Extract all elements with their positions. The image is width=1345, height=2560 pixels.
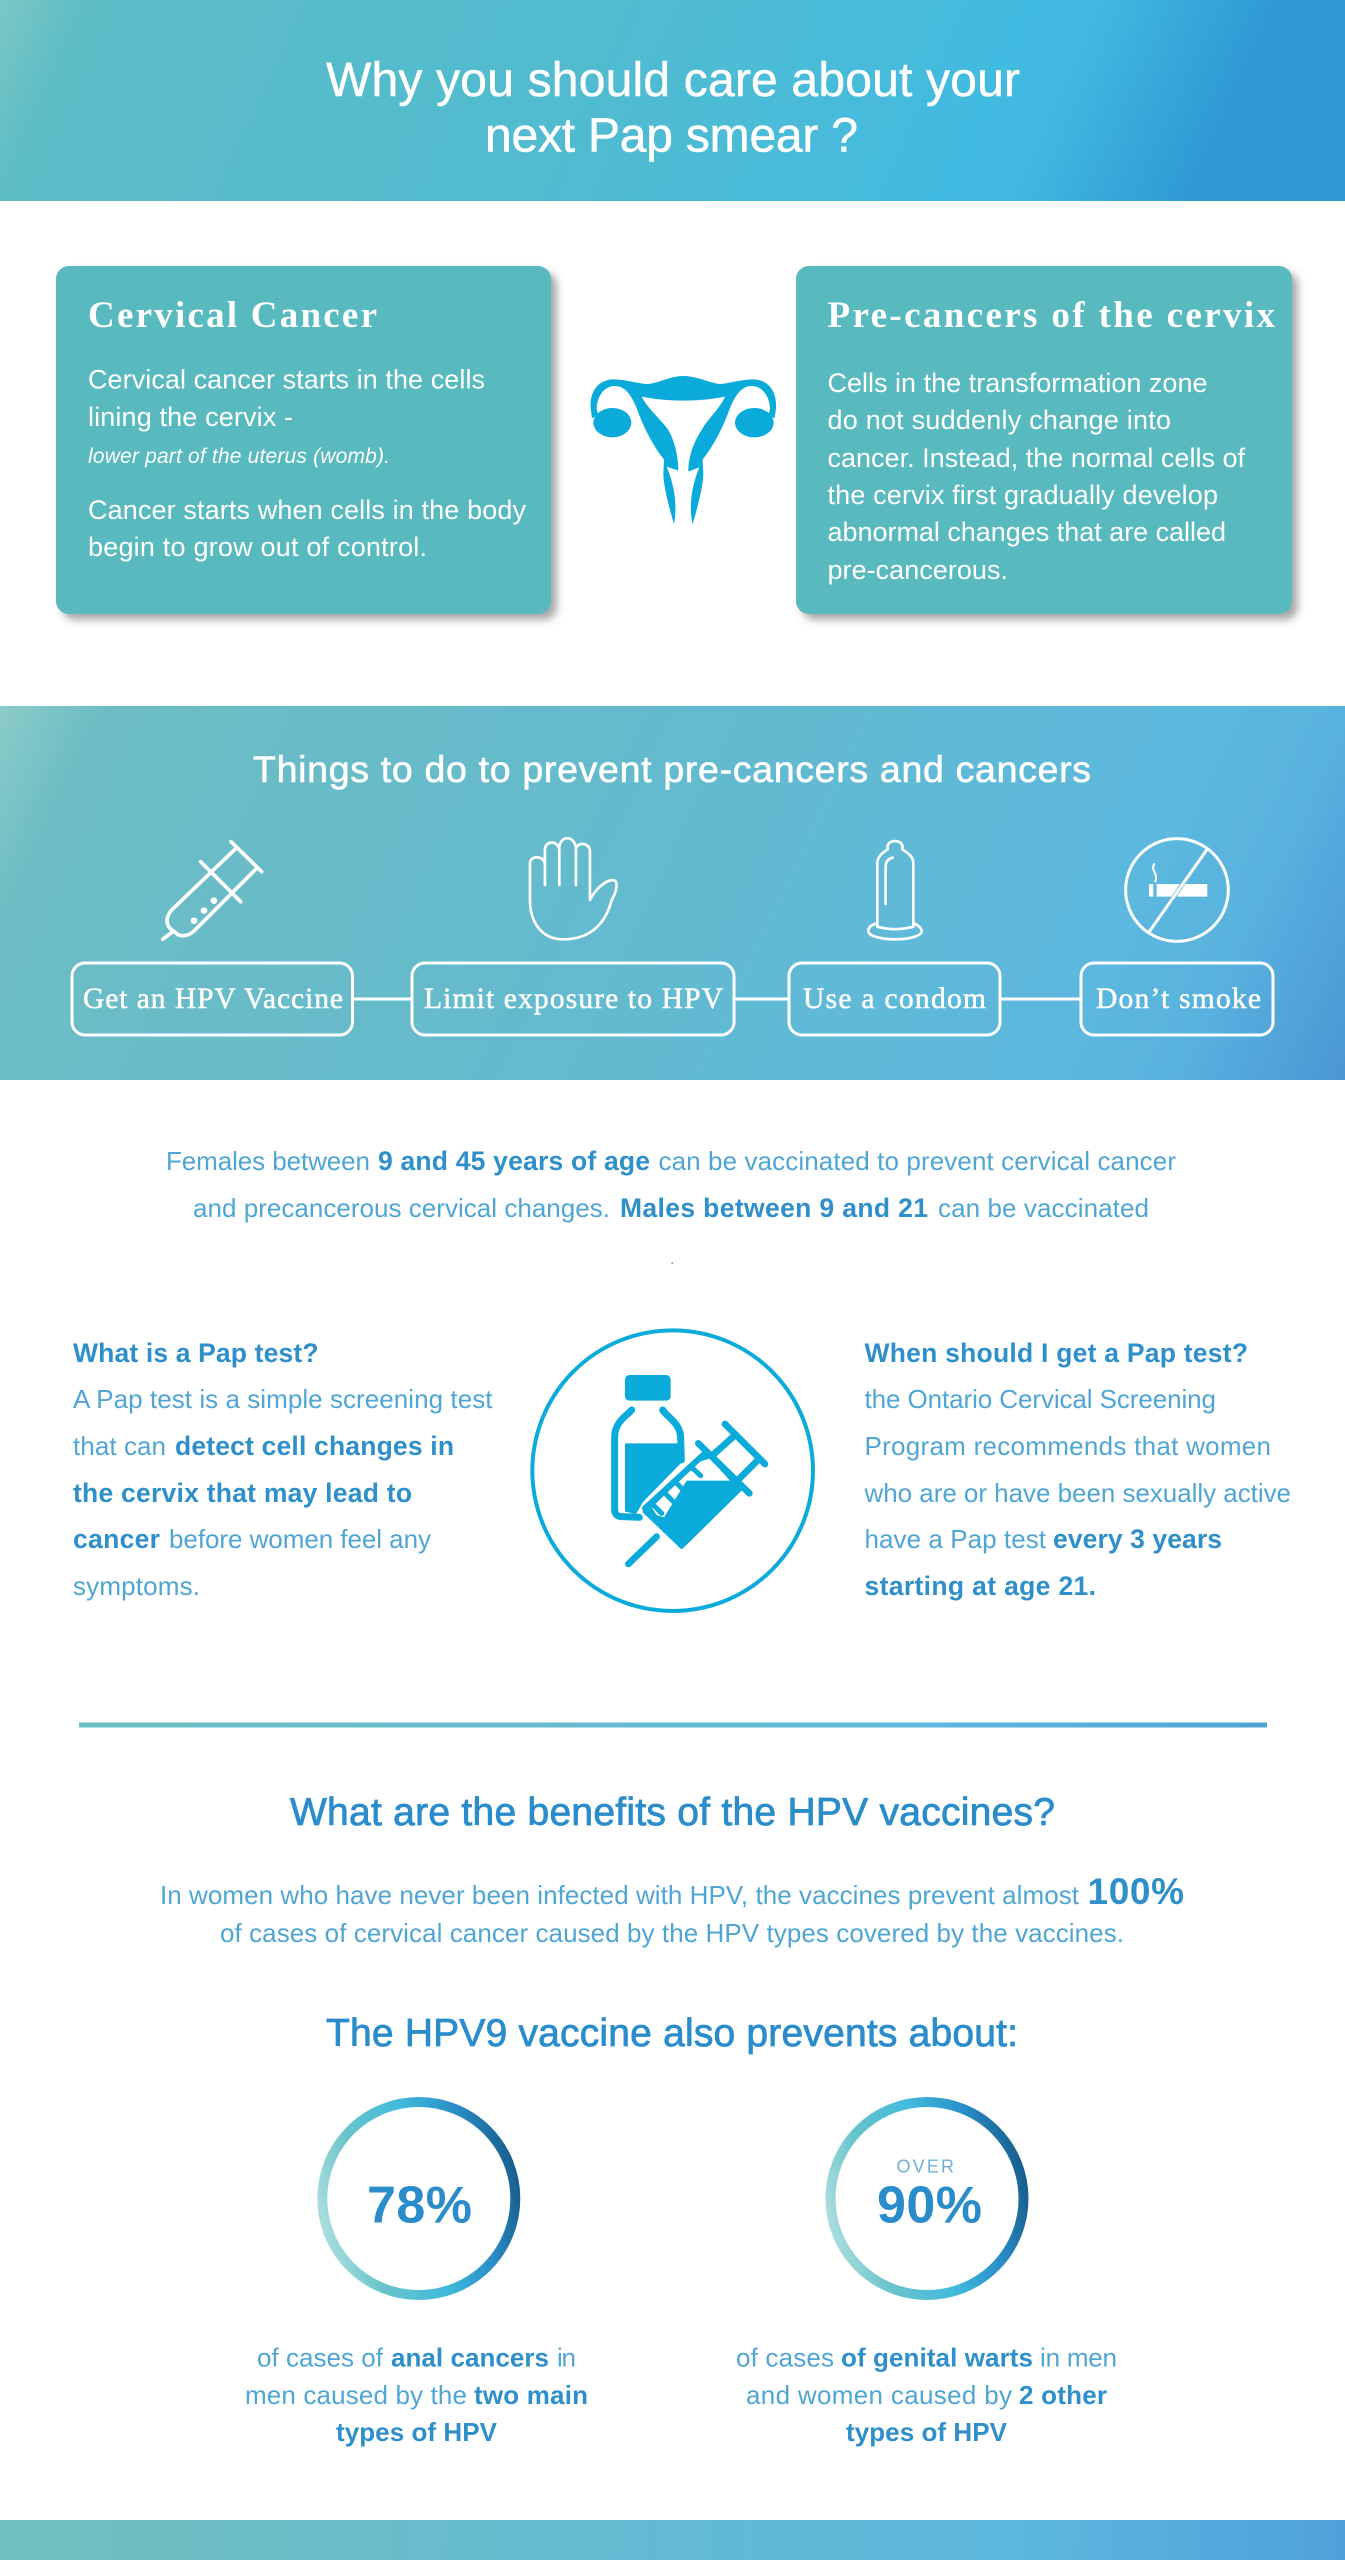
text: what is a pap test: A Pap test is a simple screening test — [73, 1384, 493, 1414]
text: when should i get a pap test: the Ontario Cervical Screening — [864, 1384, 1216, 1414]
text: pre-cancers description: pre-cancerous. — [828, 555, 1008, 585]
title — [326, 54, 1020, 162]
text: pre-cancers description: abnormal changes that are called — [828, 517, 1226, 547]
text: when should i get a pap test: have a Pap test — [864, 1524, 1047, 1554]
text: benefits description: 100% — [1088, 1871, 1184, 1912]
box: use a condom: Use a condom — [803, 983, 986, 1015]
text: what is a pap test: the cervix that may lead to — [73, 1478, 412, 1508]
text: genital warts stat: of genital warts — [841, 2342, 1033, 2372]
text: cervical cancer description: Cervical cancer starts in the cells — [88, 364, 485, 394]
text: what is a pap test: cancer — [73, 1524, 160, 1554]
text: vaccination ages: and precancerous cervical changes. — [193, 1193, 610, 1223]
icon: no smoking — [1126, 839, 1228, 941]
text: benefits description — [160, 1871, 1184, 1948]
footer band — [0, 2520, 1345, 2560]
text: when should i get a pap test: starting at age 21. — [864, 1571, 1096, 1601]
text: anal cancers stat: in — [557, 2342, 576, 2372]
box: get an hpv vaccine — [72, 963, 352, 1035]
icon: vaccine bottle and syringe in circle — [532, 1330, 813, 1611]
box: get an hpv vaccine: Get an HPV Vaccine — [83, 983, 343, 1015]
heading: benefits of the hpv vaccines: What are the benefits of the HPV vaccines? — [290, 1791, 1055, 1834]
title: Why you should care about your — [326, 54, 1020, 107]
box: don't smoke: Don’t smoke — [1096, 983, 1261, 1015]
box: use a condom — [789, 963, 1000, 1035]
text: benefits description: In women who have never been infected with HPV, the vaccines prevent almost — [160, 1880, 1080, 1910]
box: don't smoke — [1081, 963, 1273, 1035]
text: cervical cancer description: Cancer starts when cells in the body — [88, 495, 526, 525]
text: what is a pap test: before women feel any — [169, 1524, 431, 1554]
text: pre-cancers description: do not suddenly change into — [828, 405, 1171, 435]
stat ring: 78% — [322, 2102, 515, 2295]
text: vaccination ages — [166, 1146, 1176, 1268]
text: benefits description: of cases of cervical cancer caused by the HPV types covered by the vaccines. — [220, 1918, 1124, 1948]
text: anal cancers stat: men caused by the — [245, 2380, 467, 2410]
text: pre-cancers description: cancer. Instead, the normal cells of — [828, 443, 1245, 473]
text: what is a pap test: What is a Pap test? — [73, 1338, 318, 1368]
text: when should i get a pap test — [864, 1338, 1291, 1601]
text: cervical cancer description — [88, 364, 526, 562]
panel: cervical cancer — [56, 266, 551, 614]
text: vaccination ages: 9 and 45 years of age — [378, 1146, 650, 1176]
icon: uterus — [591, 376, 776, 524]
text: when should i get a pap test: Program recommends that women — [864, 1431, 1271, 1461]
text: what is a pap test: symptoms. — [73, 1571, 200, 1601]
text: pre-cancers description: Cells in the transformation zone — [828, 368, 1208, 398]
header banner — [0, 0, 1345, 201]
panel: things to do to prevent — [0, 706, 1345, 1080]
title: next Pap smear ? — [485, 110, 858, 162]
stat ring: over 90%: 90% — [877, 2176, 982, 2234]
text: anal cancers stat — [245, 2342, 588, 2447]
text: anal cancers stat: types of HPV — [336, 2417, 498, 2447]
panel: pre-cancers of the cervix — [796, 266, 1292, 614]
text: vaccination ages: can be vaccinated to prevent cervical cancer — [658, 1146, 1176, 1176]
text: what is a pap test: that can — [73, 1431, 166, 1461]
text: pre-cancers description: the cervix first gradually develop — [828, 480, 1218, 510]
text: cervical cancer description: lining the cervix - — [88, 402, 293, 432]
heading: pre-cancers: Pre-cancers of the cervix — [828, 295, 1276, 336]
text: what is a pap test: detect cell changes in — [175, 1431, 454, 1461]
heading: things to do: Things to do to prevent pre-cancers and cancers — [253, 748, 1091, 790]
icon: raised hand — [530, 838, 617, 939]
text: anal cancers stat: of cases of — [257, 2342, 384, 2372]
connectors between action boxes — [352, 998, 1081, 1000]
text: cervical cancer description: lower part of the uterus (womb). — [88, 445, 390, 468]
text: genital warts stat: of cases — [736, 2342, 834, 2372]
text: vaccination ages: . — [670, 1251, 674, 1268]
text: genital warts stat — [736, 2342, 1117, 2447]
heading: cervical cancer: Cervical Cancer — [88, 295, 377, 336]
box: limit exposure — [412, 963, 734, 1035]
text: vaccination ages: Males between 9 and 21 — [620, 1193, 928, 1223]
heading: hpv9 vaccine also prevents: The HPV9 vaccine also prevents about: — [326, 2012, 1018, 2055]
text: genital warts stat: 2 other — [1019, 2380, 1107, 2410]
stat ring: 78%: 78% — [367, 2176, 472, 2234]
stat ring: over 90% — [830, 2102, 1024, 2295]
icon: condom — [868, 841, 922, 939]
text: genital warts stat: and women caused by — [746, 2380, 1012, 2410]
text: when should i get a pap test: When should I get a Pap test? — [864, 1338, 1248, 1368]
box: limit exposure: Limit exposure to HPV — [424, 983, 723, 1015]
text: vaccination ages: Females between — [166, 1146, 370, 1176]
icon: syringe outline — [163, 842, 262, 939]
text: cervical cancer description: begin to grow out of control. — [88, 532, 427, 562]
text: vaccination ages: can be vaccinated — [938, 1193, 1149, 1223]
text: anal cancers stat: two main — [474, 2380, 588, 2410]
text: when should i get a pap test: every 3 years — [1053, 1524, 1222, 1554]
text: genital warts stat: in men — [1040, 2342, 1117, 2372]
text: anal cancers stat: anal cancers — [391, 2342, 549, 2372]
text: genital warts stat: types of HPV — [846, 2417, 1008, 2447]
stat ring: over 90%: OVER — [896, 2157, 954, 2177]
text: pre-cancers description — [828, 368, 1245, 585]
text: when should i get a pap test: who are or have been sexually active — [864, 1478, 1291, 1508]
text: what is a pap test — [73, 1338, 493, 1601]
